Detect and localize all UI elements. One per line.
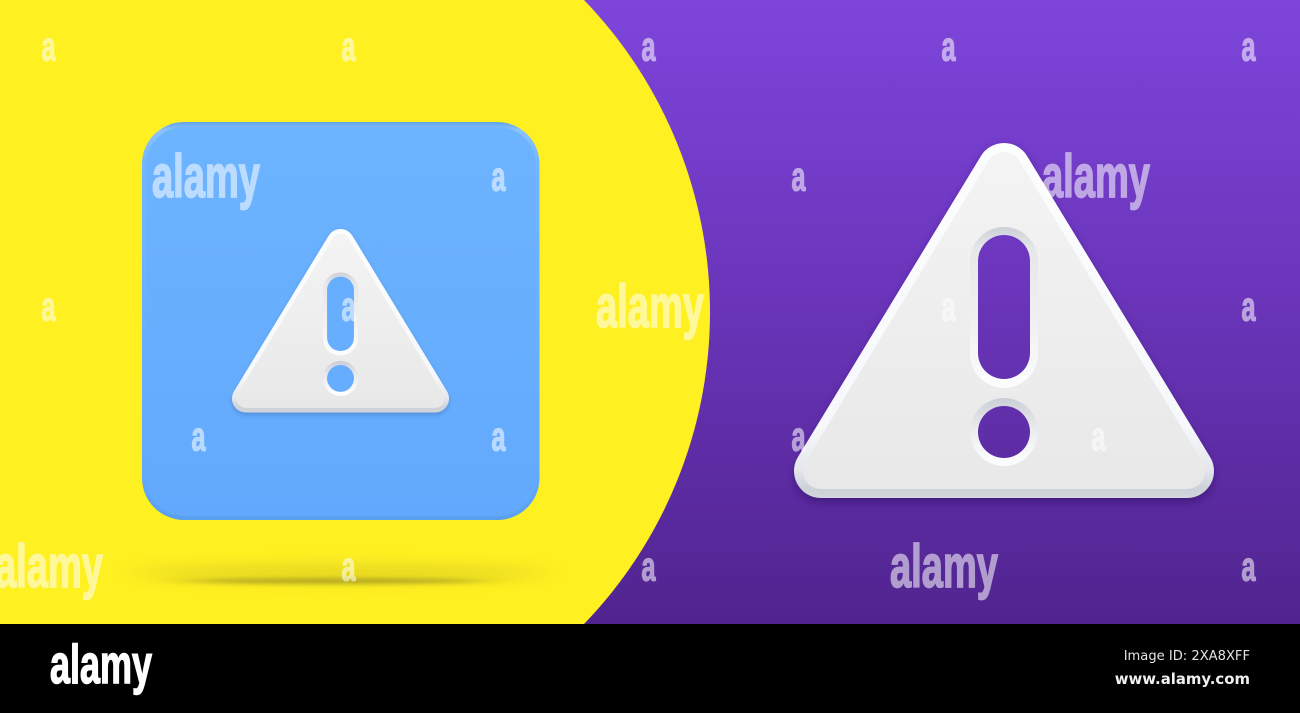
floor shadow under blue tile bbox=[135, 564, 545, 584]
watermark pattern: a bbox=[1242, 24, 1256, 70]
watermark pattern: alamy bbox=[1042, 143, 1150, 210]
icon: large warning triangle bbox=[821, 170, 1187, 476]
watermark pattern: alamy bbox=[152, 143, 260, 210]
watermark pattern: a bbox=[492, 414, 506, 460]
watermark pattern: a bbox=[1242, 544, 1256, 590]
footer logo: alamy bbox=[50, 633, 152, 695]
watermark pattern: alamy bbox=[0, 533, 103, 600]
footer bar bbox=[0, 624, 1300, 713]
watermark pattern: a bbox=[492, 154, 506, 200]
watermark pattern: a bbox=[342, 544, 356, 590]
watermark pattern: a bbox=[42, 24, 56, 70]
small warning triangle bbox=[246, 243, 435, 401]
image id: Image ID: 2XA8XFF bbox=[1124, 649, 1250, 664]
watermark pattern: a bbox=[942, 24, 956, 70]
exclamation dot bbox=[970, 398, 1038, 466]
watermark pattern: a bbox=[42, 284, 56, 330]
watermark pattern: alamy bbox=[596, 273, 704, 340]
watermark pattern: a bbox=[792, 414, 806, 460]
watermark pattern: a bbox=[342, 24, 356, 70]
website: www.alamy.com bbox=[1115, 670, 1250, 688]
watermark pattern: a bbox=[792, 154, 806, 200]
watermark pattern: a bbox=[342, 284, 356, 330]
tile body bbox=[142, 122, 540, 520]
watermark pattern: a bbox=[192, 414, 206, 460]
watermark pattern: alamy bbox=[890, 533, 998, 600]
watermark pattern: a bbox=[942, 284, 956, 330]
watermark pattern: a bbox=[1092, 414, 1106, 460]
watermark pattern: a bbox=[642, 24, 656, 70]
icon: blue rounded tile with warning triangle bbox=[142, 122, 540, 520]
watermark pattern: a bbox=[1242, 284, 1256, 330]
watermark pattern: a bbox=[642, 544, 656, 590]
tile face bbox=[146, 127, 536, 516]
exclamation slot bbox=[970, 227, 1038, 388]
panel: yellow circle background bbox=[0, 0, 710, 624]
watermark pattern bbox=[0, 24, 1256, 600]
